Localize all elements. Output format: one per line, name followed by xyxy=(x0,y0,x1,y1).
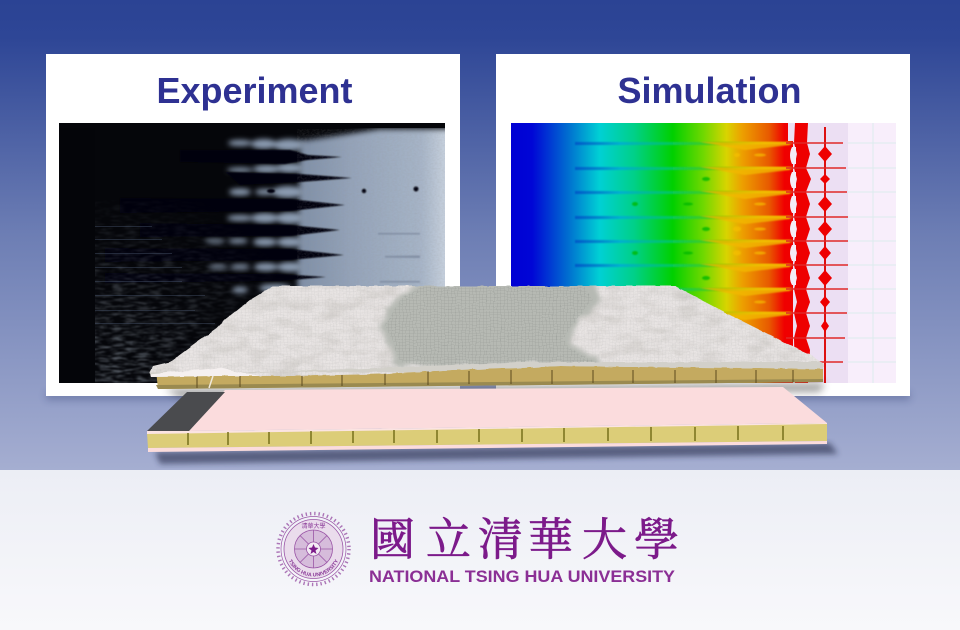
foam core of the real panel xyxy=(156,360,823,389)
shadow under panels xyxy=(165,383,825,398)
seal emblem: TSING HUA UNIVERSITY xyxy=(289,559,338,576)
pink laminate top surface xyxy=(189,387,827,431)
heading: Experiment: Experiment xyxy=(156,70,352,111)
footer band xyxy=(0,470,960,630)
panel: simulation xyxy=(496,54,910,396)
seal emblem xyxy=(276,512,351,586)
logo: National Tsing Hua University xyxy=(276,512,679,586)
seal emblem: 清華大學 xyxy=(301,522,326,530)
blue gradient background xyxy=(0,0,960,470)
English university name: NATIONAL TSING HUA UNIVERSITY xyxy=(369,567,676,586)
image: experiment flow-front photo xyxy=(59,123,460,383)
panel shadows xyxy=(46,392,910,400)
Chinese university name: 國立清華大學 xyxy=(370,515,679,565)
dim streaks at lower left xyxy=(95,208,246,383)
flow front red columns xyxy=(786,123,848,383)
photo: glass-fabric sandwich panel on foam core xyxy=(145,280,838,464)
foam core side xyxy=(147,423,827,448)
chart: simulated resin flow heat map xyxy=(511,123,896,383)
glass cloth xyxy=(145,280,827,379)
panel: experiment xyxy=(46,54,460,396)
model: simulated sandwich panel xyxy=(147,387,838,464)
heading: Simulation: Simulation xyxy=(618,70,802,111)
